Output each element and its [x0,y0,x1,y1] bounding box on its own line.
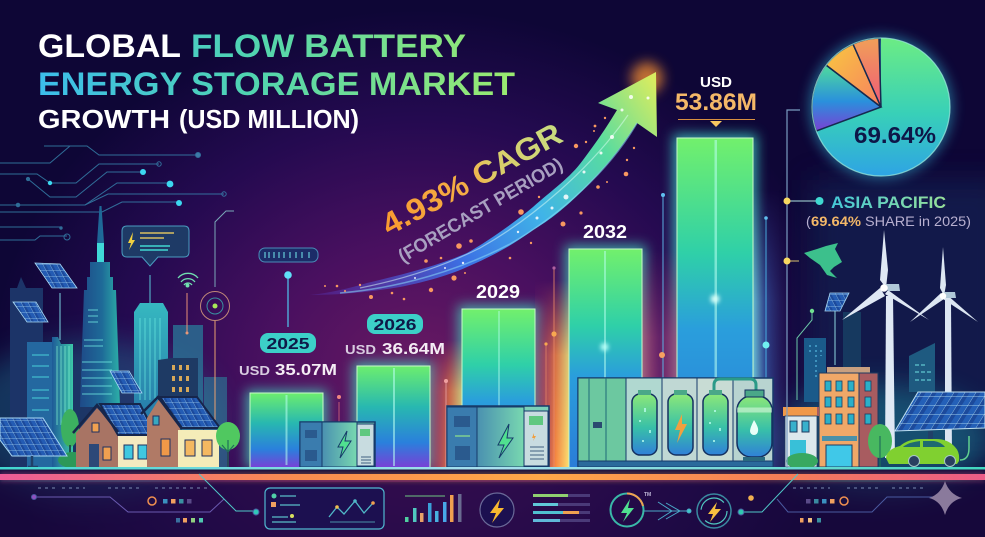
rooftop solar panels floating [13,263,142,393]
pie chart [812,38,950,176]
icon: bolt circle 3 [697,494,731,528]
bar glows [246,134,757,468]
region label: ( [806,213,811,229]
pie connector [784,110,824,468]
small status pill [259,248,318,262]
flow battery system [578,378,773,467]
ground line [0,467,985,474]
icon: wifi [178,273,198,287]
bottom circuit left [32,474,259,515]
tree right of houses [216,422,240,467]
bottom circuit right [738,474,950,515]
title: GLOBAL [38,28,181,64]
speech bubble dashboard [122,226,189,266]
region label [806,193,971,229]
icon: bar chart [405,494,462,522]
CAGR label: 4.93% CAGR [376,116,568,242]
sparkles [324,117,635,300]
small shop [783,407,819,469]
pie value: 69.64% [854,122,936,148]
label final value: USD [700,74,732,91]
region label: SHARE in 2025) [865,213,971,229]
house 1 [73,404,156,467]
label 2026: 36.64M [382,341,445,358]
bottom status squares right [800,497,848,522]
label 2025: USD [239,363,270,378]
icon: bolt circle 2 [610,492,651,526]
container 1 [300,422,375,467]
wind turbine 2 [910,247,978,458]
label 2025: 2025 [266,336,310,353]
bar 2034 [677,138,753,468]
bar 2029 [462,309,535,468]
electrolyte tank 1 [632,390,657,455]
dashboard panel [265,488,384,529]
progress bars [533,494,590,522]
title: GROWTH [38,104,170,134]
title [38,28,515,134]
container 2 [447,406,549,467]
electrolyte tank 2 [668,390,693,455]
pie glow [809,35,953,179]
label 2029: 2029 [476,282,520,302]
title: FLOW BATTERY [191,28,466,64]
icon: connector arrow [644,502,691,520]
arrow glow [631,62,663,94]
region label: ASIA PACIFIC [831,193,946,212]
label 2025 [239,333,337,379]
right city backdrop [797,293,935,422]
solar array right [895,392,985,441]
city skyline [10,206,227,468]
solar array left [0,418,67,467]
icon: bolt circle 1 [480,493,514,527]
circuit glow nodes [48,169,182,206]
label 2026: 2026 [374,317,417,334]
apartment building [819,367,878,467]
bottom status squares left [148,497,203,522]
vertical light lines [284,193,770,468]
icon: north america map [804,243,842,278]
label 2026 [345,314,445,358]
energy band [0,474,985,480]
title: ENERGY STORAGE MARKET [38,66,515,102]
house 2 [141,397,220,467]
bar 2026 [357,366,430,468]
region label: 69.64% [811,213,862,229]
tall pole and beacon [186,211,234,420]
tree right [868,424,892,467]
circuit traces top left [0,146,226,240]
label 2026: USD [345,342,376,357]
bar 2025 [250,393,323,468]
icon: bolt circle 2: TM [644,492,651,498]
growth arrow [310,72,657,295]
electric car [886,436,969,466]
electrolyte tank 3 [703,390,728,455]
title: (USD MILLION) [179,104,359,134]
label 2032: 2032 [583,222,627,242]
gaps between bars [430,190,787,468]
pressure vessel [737,390,772,461]
CAGR label: (FORECAST PERIOD) [395,154,567,267]
tree behind house [58,409,88,468]
label 2025: 35.07M [275,362,337,379]
label final value: 53.86M [675,89,757,116]
wind turbine 1 [842,230,929,458]
label final value [675,74,757,127]
icon: sparkle star [929,481,962,515]
bar 2032 [569,249,642,468]
